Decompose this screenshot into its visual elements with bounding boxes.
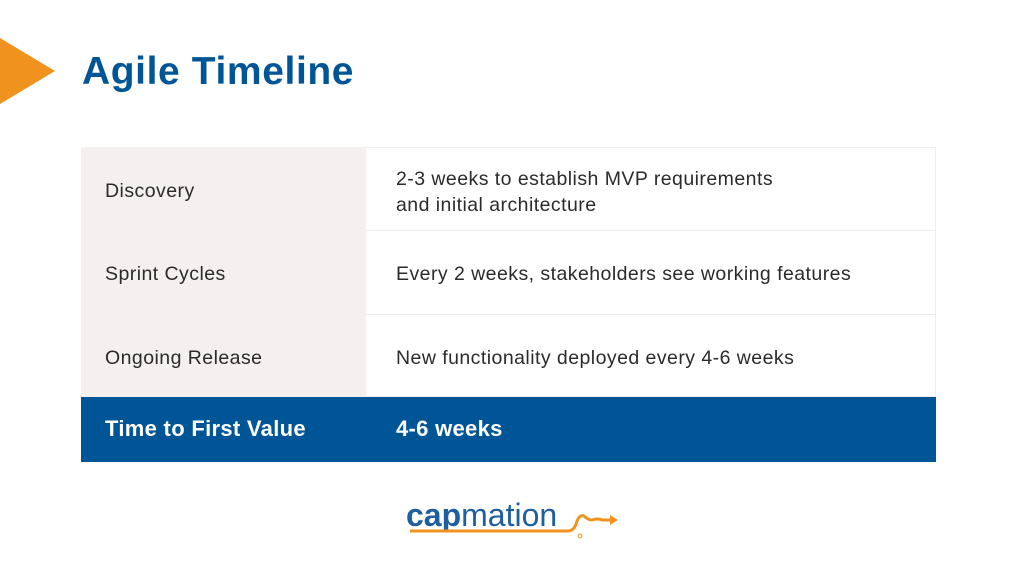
summary label: Time to First Value (105, 416, 306, 441)
row: release label: Ongoing Release (105, 347, 262, 369)
right column borders (366, 147, 936, 397)
summary bar (81, 397, 936, 462)
row: discovery text (396, 168, 773, 216)
row: sprint label: Sprint Cycles (105, 263, 226, 285)
summary value: 4-6 weeks (396, 416, 503, 441)
row: sprint text: Every 2 weeks, stakeholders see working features (396, 263, 851, 285)
row: discovery text: 2-3 weeks to establish MVP requirements (396, 168, 773, 190)
row: discovery text: and initial architecture (396, 194, 596, 216)
row: release text: New functionality deployed every 4-6 weeks (396, 347, 794, 369)
icon: orange triangle (0, 38, 55, 104)
title: Agile Timeline (82, 50, 354, 93)
logo: capmation (406, 497, 618, 538)
row: discovery label: Discovery (105, 180, 195, 202)
logo swoosh arrow (410, 514, 618, 538)
table (81, 147, 936, 462)
left column background (81, 147, 366, 397)
logo text: capmation (406, 497, 557, 533)
